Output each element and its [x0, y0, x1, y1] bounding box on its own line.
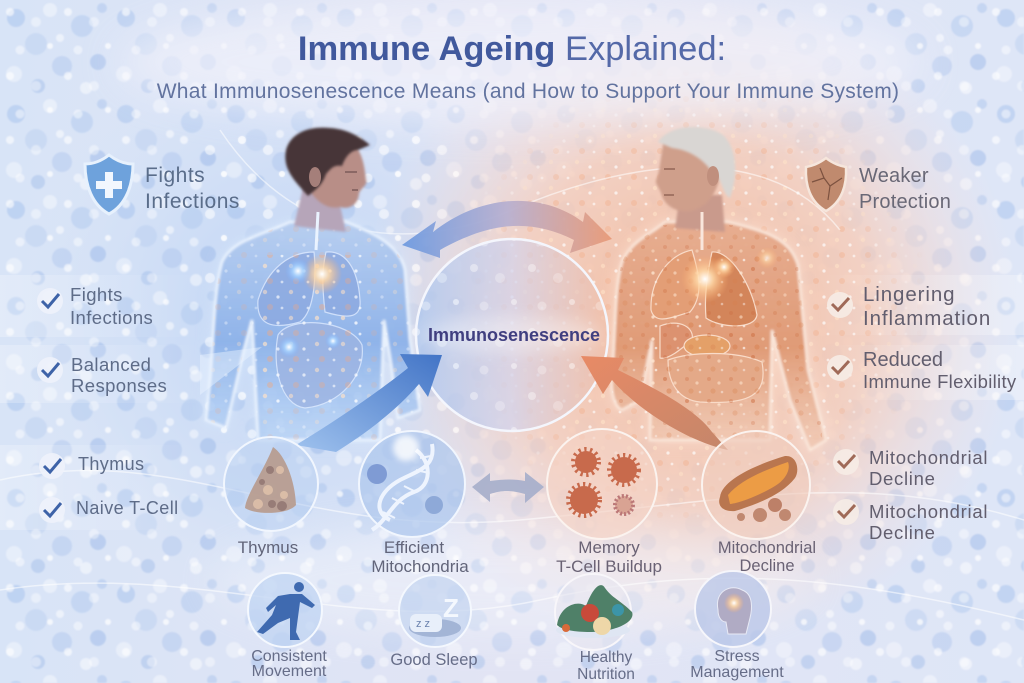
- label: mitochondrial decline: Decline: [739, 557, 795, 575]
- head: [305, 135, 366, 208]
- check item: mitochondrial decline 2: Decline: [869, 522, 936, 543]
- check item: balanced responses: Responses: [71, 375, 167, 396]
- label: stress management: Management: [690, 664, 784, 681]
- callout: fights infections: [85, 155, 240, 214]
- icon: mitochondrion: [702, 431, 810, 539]
- check item: reduced flexibility: Reduced: [863, 349, 943, 371]
- arrow: older to centre: [581, 356, 728, 450]
- panel: right checklist: [820, 275, 1024, 543]
- check item: lingering inflammation: Lingering: [863, 283, 955, 306]
- check item: mitochondrial decline 2: Mitochondrial: [869, 501, 988, 522]
- icon: stress management: [695, 571, 771, 647]
- ear: [309, 167, 321, 187]
- icon: good sleep: z z: [416, 618, 430, 630]
- check item: naive T-cell: Naive T-Cell: [76, 498, 178, 518]
- check item: fights infections: Fights: [70, 284, 123, 305]
- label: healthy nutrition: Healthy: [580, 649, 633, 666]
- check item: mitochondrial decline 1: Mitochondrial: [869, 447, 988, 468]
- subtitle: What Immunosenescence Means (and How to Support Your Immune System): [157, 80, 899, 103]
- icon: DNA: [359, 431, 465, 537]
- label: memory T-cell buildup: Memory: [578, 538, 640, 557]
- face shading: [664, 169, 675, 195]
- check item: thymus: Thymus: [78, 454, 144, 474]
- label: consistent movement: Movement: [252, 663, 327, 680]
- decorative crack: [812, 168, 842, 200]
- arrow: young to centre: [296, 354, 442, 452]
- callout: fights infections: Infections: [145, 190, 240, 213]
- label: healthy nutrition: Nutrition: [577, 666, 635, 683]
- callout: weaker protection: Weaker: [859, 165, 929, 187]
- check item: balanced responses: [37, 354, 167, 396]
- panel: older figure: [612, 127, 826, 450]
- neck: [294, 188, 346, 232]
- icon: plus: [96, 172, 122, 198]
- check item: thymus: [39, 453, 144, 479]
- head: [656, 133, 722, 211]
- icon: healthy nutrition: [555, 574, 632, 650]
- icon: memory T-cells: [547, 429, 657, 539]
- title: Immune Ageing Explained:: [298, 30, 726, 68]
- label: good sleep: Good Sleep: [390, 651, 478, 669]
- icon: consistent movement: [248, 573, 322, 647]
- check item: lingering inflammation: Inflammation: [863, 307, 991, 330]
- face shading: [345, 172, 358, 190]
- check item: lingering inflammation: [827, 283, 991, 330]
- label: thymus: Thymus: [238, 538, 298, 557]
- icon: cracked shield: [806, 158, 846, 211]
- neck: [675, 195, 725, 232]
- organs: [651, 250, 763, 403]
- arrow: small double: [472, 472, 544, 503]
- label: mitochondrial decline: Mitochondrial: [718, 539, 816, 557]
- check item: fights infections: Infections: [70, 307, 153, 328]
- label: efficient mitochondria: Mitochondria: [371, 557, 469, 576]
- callout: weaker protection: [806, 158, 951, 213]
- central orb: Immunosenescence: [416, 239, 608, 431]
- check item: mitochondrial decline 1: [833, 447, 988, 489]
- organs: [258, 252, 362, 408]
- check item: naive T-cell: [39, 497, 178, 523]
- label: efficient mitochondria: Efficient: [384, 538, 444, 557]
- icon: good sleep: Z: [443, 593, 459, 623]
- arrow: top swoop: [402, 201, 612, 258]
- hair: [658, 127, 735, 198]
- label: stress management: Stress: [714, 648, 760, 665]
- ear: [707, 166, 719, 186]
- check item: balanced responses: Balanced: [71, 354, 151, 375]
- panel: left checklist: [0, 275, 205, 530]
- check item: mitochondrial decline 2: [833, 499, 988, 543]
- label: consistent movement: Consistent: [251, 648, 327, 665]
- label: memory T-cell buildup: T-Cell Buildup: [556, 557, 662, 576]
- icon: blue shield: [85, 155, 133, 214]
- central orb: Immunosenescence: Immunosenescence: [428, 325, 600, 345]
- check item: mitochondrial decline 1: Decline: [869, 468, 936, 489]
- check item: reduced flexibility: [827, 349, 1017, 392]
- check item: reduced flexibility: Immune Flexibility: [863, 371, 1017, 392]
- callout: fights infections: Fights: [145, 164, 205, 187]
- icon: thymus: [224, 437, 318, 531]
- check item: fights infections: [37, 284, 153, 328]
- panel: young figure: [200, 128, 420, 440]
- callout: weaker protection: Protection: [859, 191, 951, 213]
- icon: good sleep: [399, 575, 471, 647]
- hair: [285, 128, 370, 196]
